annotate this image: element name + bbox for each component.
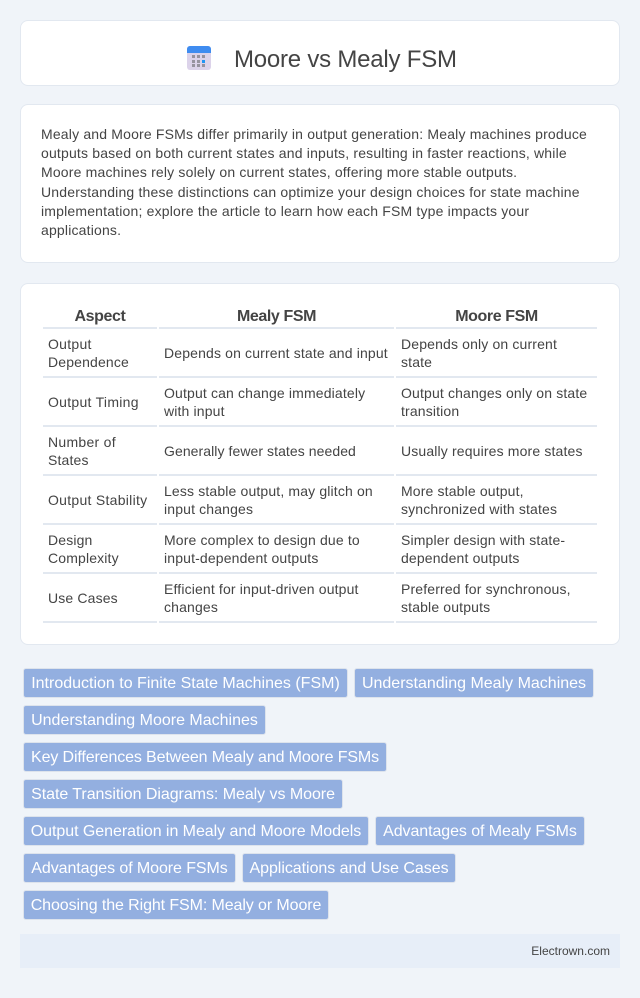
row: output dependence: [48, 336, 557, 370]
tag: Applications and Use Cases: [249, 860, 449, 877]
row: output timing: Output changes only on state: [401, 385, 587, 401]
row: output stability: Output Stability: [48, 492, 147, 508]
tag: [375, 816, 585, 846]
intro paragraph: [41, 126, 587, 238]
tag: State Transition Diagrams: Mealy vs Moore: [31, 786, 335, 803]
row: output dependence: state: [401, 354, 432, 370]
tag: [23, 705, 266, 735]
table header: Moore FSM: [455, 308, 538, 325]
tag: [23, 816, 369, 846]
tag: [23, 853, 236, 883]
row: design complexity: dependent outputs: [401, 550, 520, 566]
intro paragraph: Mealy and Moore FSMs differ primarily in output generation: Mealy machines produce: [41, 126, 587, 142]
intro paragraph: implementation; explore the article to learn how each FSM type impacts your: [41, 203, 529, 219]
row: design complexity: Design: [48, 532, 92, 548]
tag: Understanding Mealy Machines: [362, 675, 586, 692]
tag: Output Generation in Mealy and Moore Models: [31, 823, 361, 840]
comparison table panel: [20, 283, 620, 645]
row: output stability: Less stable output, may glitch on: [164, 483, 373, 499]
row: number of states: Number of: [48, 434, 116, 450]
row: design complexity: More complex to design due to: [164, 532, 360, 548]
row: use cases: changes: [164, 599, 218, 615]
tag: Introduction to Finite State Machines (FSM): [31, 675, 340, 692]
row: design complexity: [48, 532, 565, 566]
row: use cases: Use Cases: [48, 590, 118, 606]
row: output stability: [48, 483, 557, 517]
row: output dependence: Output: [48, 336, 92, 352]
row: output dependence: Depends on current state and input: [164, 345, 388, 361]
row: output stability: More stable output,: [401, 483, 524, 499]
row: use cases: stable outputs: [401, 599, 490, 615]
tag: [23, 668, 348, 698]
row: use cases: Preferred for synchronous,: [401, 581, 571, 597]
row: output timing: [48, 385, 587, 419]
tag: Understanding Moore Machines: [31, 712, 258, 729]
icon: calendar grid: [187, 46, 211, 70]
tag: Advantages of Mealy FSMs: [383, 823, 577, 840]
row: output dependence: Dependence: [48, 354, 129, 370]
table header: Mealy FSM: [237, 308, 316, 325]
row: use cases: [48, 581, 571, 615]
table header: [74, 308, 538, 325]
row: output timing: Output can change immediately: [164, 385, 365, 401]
row: number of states: [48, 434, 583, 468]
tag: Choosing the Right FSM: Mealy or Moore: [31, 897, 321, 914]
title: Moore vs Mealy FSM: [234, 46, 457, 73]
row: output timing: transition: [401, 403, 459, 419]
footer credit: Electrown.com: [531, 944, 610, 958]
intro paragraph: outputs based on both current states and inputs, resulting in faster reactions, while: [41, 145, 567, 161]
topic tags: [23, 668, 594, 920]
row: output timing: with input: [164, 403, 225, 419]
intro paragraph: applications.: [41, 222, 121, 238]
intro paragraph: Moore machines rely solely on current states, offering more stable outputs.: [41, 164, 517, 180]
row: number of states: Usually requires more states: [401, 443, 583, 459]
tag: [354, 668, 594, 698]
intro paragraph: Understanding these distinctions can optimize your design choices for state machine: [41, 184, 580, 200]
row: output stability: input changes: [164, 501, 253, 517]
row: number of states: States: [48, 452, 89, 468]
row: output stability: synchronized with states: [401, 501, 557, 517]
row: output timing: Output Timing: [48, 394, 139, 410]
row: use cases: Efficient for input-driven output: [164, 581, 359, 597]
table header: Aspect: [75, 308, 125, 325]
row: design complexity: input-dependent outputs: [164, 550, 318, 566]
footer bar: [20, 934, 620, 968]
row: output dependence: Depends only on current: [401, 336, 557, 352]
tag: Advantages of Moore FSMs: [31, 860, 228, 877]
tag: Key Differences Between Mealy and Moore FSMs: [31, 749, 379, 766]
row: design complexity: Complexity: [48, 550, 119, 566]
row: number of states: Generally fewer states needed: [164, 443, 356, 459]
tag: [23, 779, 343, 809]
tag: [242, 853, 456, 883]
comparison table: [43, 308, 597, 623]
tag: [23, 890, 329, 920]
row: design complexity: Simpler design with state-: [401, 532, 565, 548]
header panel: [20, 20, 620, 86]
tag: [23, 742, 387, 772]
intro text panel: [20, 104, 620, 263]
